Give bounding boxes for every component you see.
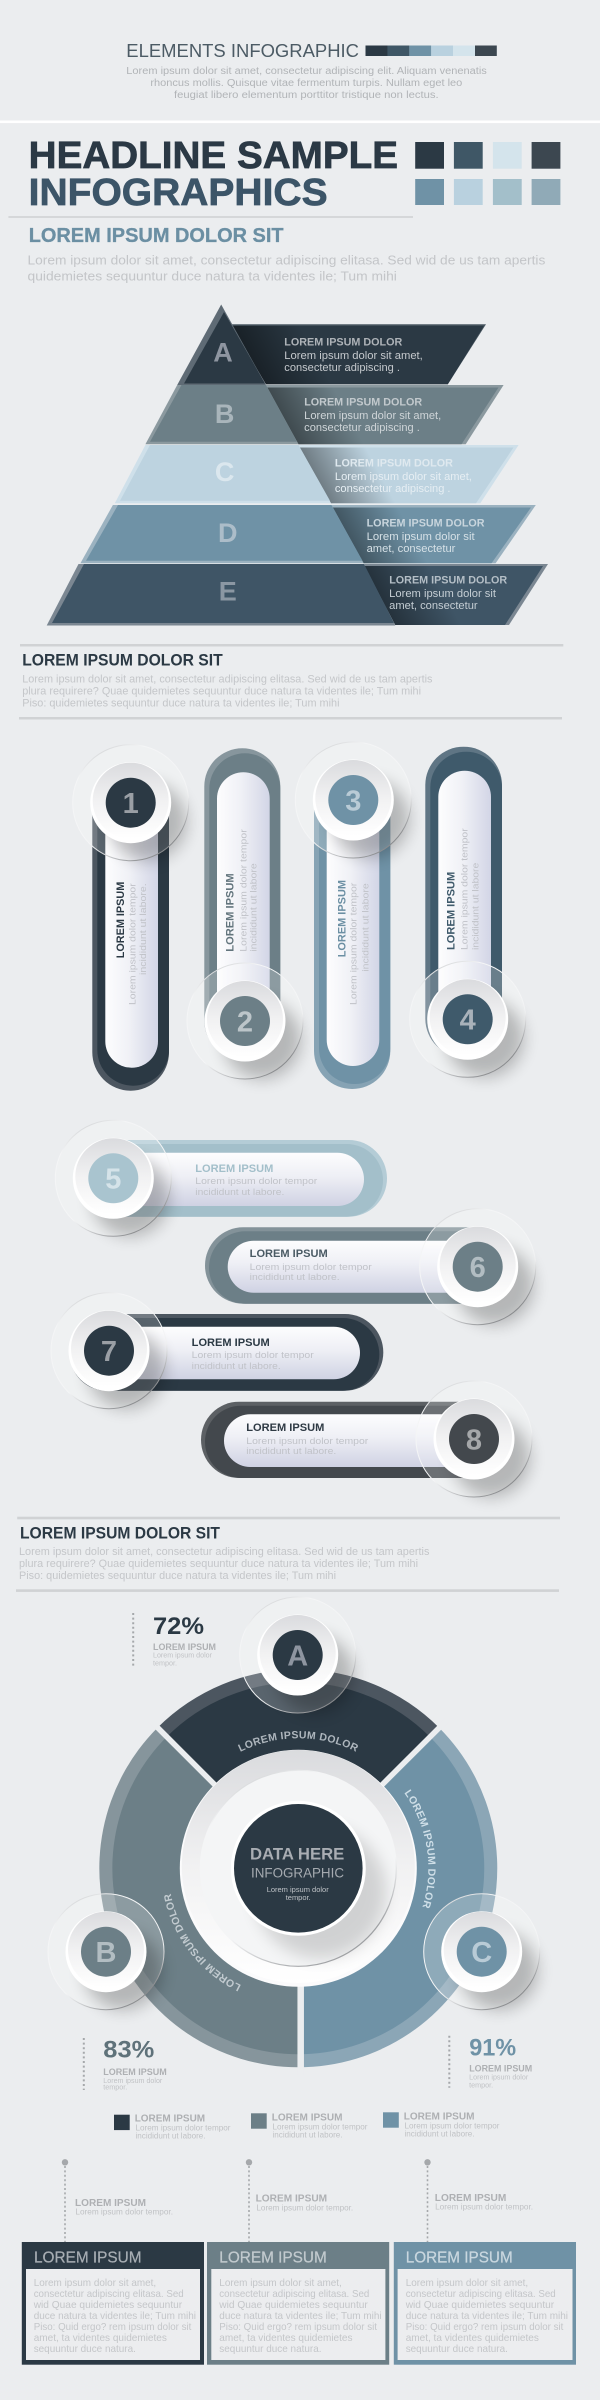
pin label 3: LOREM IPSUM bbox=[435, 2192, 507, 2204]
layer D: D bbox=[218, 518, 237, 548]
vertical pill 1: Lorem ipsum dolor tempor bbox=[127, 883, 138, 1005]
legend item 1 bbox=[114, 2113, 231, 2141]
text box 3: sequuntur duce natura. bbox=[406, 2343, 508, 2355]
horizontal pill 6: 6 bbox=[470, 1252, 486, 1284]
badge C bbox=[424, 1894, 540, 2010]
ribbon A bbox=[232, 324, 486, 384]
legend item 2 bbox=[251, 2112, 368, 2140]
horizontal pill 7: Lorem ipsum dolor tempor bbox=[192, 1350, 314, 1361]
legend item 1: LOREM IPSUM bbox=[135, 2113, 205, 2125]
ribbon C: consectetur adipiscing . bbox=[335, 483, 450, 495]
legend item 2: incididunt ut labore. bbox=[272, 2131, 342, 2140]
segment B bbox=[99, 1728, 298, 2067]
stat 72%: tempor. bbox=[153, 1661, 177, 1668]
vertical pill 2: incididunt ut labore bbox=[249, 863, 260, 952]
badge A: A bbox=[287, 1640, 308, 1672]
text box 2: sequuntur duce natura. bbox=[219, 2343, 322, 2355]
horizontal pill 7: 7 bbox=[101, 1336, 117, 1368]
horizontal pill 6: Lorem ipsum dolor tempor bbox=[250, 1262, 372, 1273]
palette strip bbox=[366, 46, 497, 56]
intro paragraph bbox=[28, 252, 546, 284]
headline: INFOGRAPHICS bbox=[29, 172, 328, 214]
text box 3: wid Quae quidemietes sequuntur bbox=[405, 2299, 555, 2311]
header description bbox=[126, 66, 487, 101]
vertical pill 4: 4 bbox=[460, 1005, 476, 1037]
horizontal pill 6: LOREM IPSUM bbox=[250, 1248, 328, 1260]
vertical pill 1: incididunt ut labore. bbox=[138, 883, 149, 975]
pyramid chart bbox=[47, 304, 548, 626]
ribbon B bbox=[266, 385, 504, 444]
legend item 3: LOREM IPSUM bbox=[404, 2111, 475, 2123]
stat 72%: LOREM IPSUM bbox=[153, 1642, 216, 1653]
stat 72%: Lorem ipsum dolor bbox=[153, 1653, 213, 1660]
vertical pill 2: Lorem ipsum dolor tempor bbox=[239, 829, 250, 952]
stat 83%: tempor. bbox=[103, 2085, 127, 2092]
headline: HEADLINE SAMPLE bbox=[29, 135, 398, 177]
badge B: B bbox=[96, 1937, 116, 1969]
layer B bbox=[145, 385, 298, 444]
section three paragraph: Piso: quidemietes sequuntur duce natura ta videntes ile; Tum mihi bbox=[19, 1570, 336, 1582]
text box 1: Lorem ipsum dolor sit amet, bbox=[34, 2277, 156, 2289]
ribbon A: LOREM IPSUM DOLOR bbox=[284, 337, 402, 349]
ribbon B: LOREM IPSUM DOLOR bbox=[304, 397, 422, 409]
text box 1: wid Quae quidemietes sequuntur bbox=[33, 2299, 183, 2311]
layer C bbox=[115, 445, 331, 503]
centre disc: tempor. bbox=[286, 1893, 311, 1902]
pin label 2: LOREM IPSUM bbox=[256, 2193, 327, 2205]
ribbon E bbox=[364, 564, 548, 625]
vertical pill 4: LOREM IPSUM bbox=[446, 872, 458, 950]
curved label C: LOREM IPSUM DOLOR bbox=[404, 1789, 436, 1908]
text box 2: Lorem ipsum dolor sit amet, bbox=[219, 2277, 342, 2289]
ribbon E: LOREM IPSUM DOLOR bbox=[389, 575, 507, 587]
ribbon E: amet, consectetur bbox=[389, 600, 478, 612]
text box 1: consectetur adipiscing elitasa. Sed bbox=[34, 2288, 184, 2300]
stat 91%: tempor. bbox=[469, 2083, 493, 2090]
ribbon A: Lorem ipsum dolor sit amet, bbox=[284, 350, 423, 362]
text box 2: wid Quae quidemietes sequuntur bbox=[218, 2299, 368, 2311]
vertical pill 3: Lorem ipsum dolor tempor bbox=[349, 883, 360, 1005]
horizontal pill 5: Lorem ipsum dolor tempor bbox=[195, 1176, 317, 1187]
text box 1 bbox=[22, 2242, 204, 2365]
stat 72%: 72% bbox=[153, 1613, 204, 1640]
vertical pill 2 bbox=[187, 748, 303, 1079]
section three paragraph: Lorem ipsum dolor sit amet, consectetur adipiscing elitasa. Sed wid de us tam apertis bbox=[19, 1546, 430, 1558]
centre disc bbox=[180, 1750, 417, 1987]
header description: Lorem ipsum dolor sit amet, consectetur adipiscing elit. Aliquam venenatis bbox=[126, 66, 487, 77]
horizontal pill 5: 5 bbox=[105, 1164, 121, 1196]
stat 83% bbox=[84, 2037, 167, 2092]
layer A bbox=[177, 304, 266, 385]
section two heading: LOREM IPSUM DOLOR SIT bbox=[22, 652, 223, 670]
vertical pill 1: 1 bbox=[123, 788, 139, 820]
stat 72% bbox=[133, 1613, 216, 1668]
text box 3: LOREM IPSUM bbox=[406, 2249, 513, 2266]
vertical pill 2: LOREM IPSUM bbox=[224, 873, 236, 952]
text box 1: duce natura ta videntes ile; Tum mihi bbox=[34, 2310, 196, 2322]
legend item 3: Lorem ipsum dolor tempor bbox=[404, 2122, 500, 2131]
section three paragraph bbox=[19, 1546, 430, 1582]
horizontal pill 8: Lorem ipsum dolor tempor bbox=[246, 1436, 368, 1447]
stat 91%: LOREM IPSUM bbox=[469, 2064, 532, 2075]
stat 91%: 91% bbox=[469, 2035, 516, 2062]
legend item 3: incididunt ut labore. bbox=[404, 2130, 474, 2139]
text box 3 bbox=[394, 2242, 576, 2365]
colour swatches bbox=[415, 142, 560, 205]
header block bbox=[126, 41, 497, 101]
section two paragraph bbox=[22, 674, 433, 710]
pin label 2 bbox=[246, 2159, 353, 2242]
pin label 1: Lorem ipsum dolor tempor. bbox=[75, 2208, 173, 2217]
pin label 1: LOREM IPSUM bbox=[75, 2197, 146, 2209]
layer E: E bbox=[219, 577, 237, 607]
badge B bbox=[48, 1894, 164, 2010]
horizontal pill 7: incididunt ut labore. bbox=[192, 1361, 281, 1372]
header description: feugiat libero elementum porttitor tristique non lectus. bbox=[174, 90, 439, 101]
vertical pill 4 bbox=[410, 747, 526, 1077]
pin label 1 bbox=[62, 2159, 173, 2242]
ribbon D: LOREM IPSUM DOLOR bbox=[367, 518, 485, 530]
legend item 3 bbox=[383, 2111, 500, 2139]
horizontal pill 5: incididunt ut labore. bbox=[195, 1187, 284, 1198]
stat 83%: 83% bbox=[103, 2037, 154, 2064]
horizontal pill 8: LOREM IPSUM bbox=[246, 1422, 324, 1434]
horizontal pill 8: incididunt ut labore. bbox=[246, 1446, 336, 1457]
intro subheading: LOREM IPSUM DOLOR SIT bbox=[29, 225, 284, 247]
text box 2 bbox=[207, 2242, 389, 2365]
ribbon C: Lorem ipsum dolor sit amet, bbox=[335, 471, 472, 483]
centre disc: DATA HERE bbox=[250, 1844, 344, 1863]
layer C: C bbox=[215, 457, 234, 487]
text box 2: amet, ta videntes quidemietes bbox=[219, 2332, 352, 2344]
vertical pill 2: 2 bbox=[237, 1006, 253, 1038]
text box 2: duce natura ta videntes ile; Tum mihi bbox=[219, 2310, 382, 2322]
horizontal pill 6 bbox=[205, 1209, 536, 1325]
horizontal pill 5: LOREM IPSUM bbox=[195, 1163, 273, 1175]
ribbon D: Lorem ipsum dolor sit bbox=[367, 531, 475, 543]
stat 91%: Lorem ipsum dolor bbox=[469, 2075, 529, 2082]
badge A bbox=[240, 1597, 356, 1713]
text box 1: amet, ta videntes quidemietes bbox=[34, 2332, 167, 2344]
intro paragraph: Lorem ipsum dolor sit amet, consectetur adipiscing elitasa. Sed wid de us tam apertis bbox=[28, 252, 546, 268]
section two paragraph: Lorem ipsum dolor sit amet, consectetur adipiscing elitasa. Sed wid de us tam apertis bbox=[22, 674, 433, 686]
section three heading: LOREM IPSUM DOLOR SIT bbox=[20, 1524, 220, 1542]
text box 3: Lorem ipsum dolor sit amet, bbox=[406, 2277, 528, 2289]
stat 83%: LOREM IPSUM bbox=[103, 2067, 167, 2078]
pin label 2: Lorem ipsum dolor tempor. bbox=[256, 2204, 353, 2213]
vertical pill 4: incididunt ut labore bbox=[470, 863, 481, 950]
layer D bbox=[80, 505, 364, 563]
horizontal pill 7 bbox=[51, 1293, 383, 1409]
text box 3: Piso: Quid ergo? rem ipsum dolor sit bbox=[406, 2321, 563, 2333]
text box 1: Piso: Quid ergo? rem ipsum dolor sit bbox=[34, 2321, 191, 2333]
badge C: C bbox=[471, 1937, 492, 1969]
intro paragraph: quidemietes sequuntur duce natura ta videntes ile; Tum mihi bbox=[28, 268, 397, 284]
layer B: B bbox=[215, 399, 234, 429]
headline bbox=[29, 135, 398, 214]
text box 2: Piso: Quid ergo? rem ipsum dolor sit bbox=[219, 2321, 377, 2333]
ribbon C: LOREM IPSUM DOLOR bbox=[335, 458, 453, 470]
text box 3: consectetur adipiscing elitasa. Sed bbox=[406, 2288, 556, 2300]
horizontal pill 8 bbox=[201, 1381, 532, 1497]
pin label 3: Lorem ipsum dolor tempor. bbox=[435, 2203, 533, 2212]
ribbon D bbox=[332, 505, 536, 563]
segment A bbox=[158, 1669, 439, 1868]
legend item 2: LOREM IPSUM bbox=[272, 2112, 343, 2124]
pin label 3 bbox=[424, 2159, 533, 2242]
legend item 2: Lorem ipsum dolor tempor bbox=[272, 2123, 368, 2132]
legend item 1: Lorem ipsum dolor tempor bbox=[136, 2124, 231, 2133]
ribbon A: consectetur adipiscing . bbox=[284, 362, 400, 374]
layer E bbox=[47, 564, 395, 626]
ribbon B: consectetur adipiscing . bbox=[304, 422, 420, 434]
centre disc: Lorem ipsum dolor bbox=[267, 1885, 329, 1894]
text box 3: amet, ta videntes quidemietes bbox=[406, 2332, 539, 2344]
text box 1: LOREM IPSUM bbox=[34, 2249, 142, 2266]
text box 2: consectetur adipiscing elitasa. Sed bbox=[219, 2288, 369, 2300]
horizontal pill 7: LOREM IPSUM bbox=[192, 1337, 270, 1349]
centre disc: INFOGRAPHIC bbox=[251, 1864, 344, 1880]
header description: rhoncus mollis. Quisque vitae fermentum turpis. Nullam eget leo bbox=[150, 78, 463, 89]
section two paragraph: Piso: quidemietes sequuntur duce natura ta videntes ile; Tum mihi bbox=[22, 698, 339, 710]
donut chart bbox=[99, 1672, 498, 2068]
stat 91% bbox=[449, 2035, 532, 2090]
section three paragraph: plura requirere? Quae quidemietes sequuntur duce natura ta videntes ile; Tum mihi bbox=[19, 1558, 418, 1570]
vertical pill 4: Lorem ipsum dolor tempor bbox=[460, 828, 471, 950]
vertical pill 3: LOREM IPSUM bbox=[337, 880, 349, 957]
ribbon B: Lorem ipsum dolor sit amet, bbox=[304, 410, 441, 422]
horizontal pill 6: incididunt ut labore. bbox=[250, 1272, 340, 1283]
vertical pill 1: LOREM IPSUM bbox=[115, 882, 127, 958]
curved label A: LOREM IPSUM DOLOR bbox=[238, 1731, 358, 1752]
layer A: A bbox=[213, 338, 233, 368]
legend bbox=[114, 2111, 500, 2141]
stat 83%: Lorem ipsum dolor bbox=[103, 2078, 163, 2085]
vertical pill 3 bbox=[295, 742, 411, 1089]
horizontal pill 5 bbox=[55, 1120, 387, 1236]
text box 2: LOREM IPSUM bbox=[219, 2249, 327, 2266]
horizontal pill 8: 8 bbox=[466, 1424, 482, 1456]
vertical pill 3: incididunt ut labore bbox=[360, 883, 371, 972]
section two paragraph: plura requirere? Quae quidemietes sequuntur duce natura ta videntes ile; Tum mihi bbox=[22, 686, 421, 698]
legend item 1: incididunt ut labore. bbox=[136, 2132, 206, 2141]
curved label B: LOREM IPSUM DOLOR bbox=[164, 1894, 241, 1992]
vertical pill 3: 3 bbox=[345, 785, 361, 817]
text box 1: sequuntur duce natura. bbox=[34, 2343, 136, 2355]
segment C bbox=[298, 1728, 497, 2067]
ribbon E: Lorem ipsum dolor sit bbox=[389, 588, 496, 600]
text box 3: duce natura ta videntes ile; Tum mihi bbox=[406, 2310, 568, 2322]
header title: ELEMENTS INFOGRAPHIC bbox=[126, 41, 359, 61]
ribbon C bbox=[298, 445, 519, 503]
ribbon D: amet, consectetur bbox=[367, 543, 456, 555]
vertical pill 1 bbox=[73, 745, 189, 1091]
